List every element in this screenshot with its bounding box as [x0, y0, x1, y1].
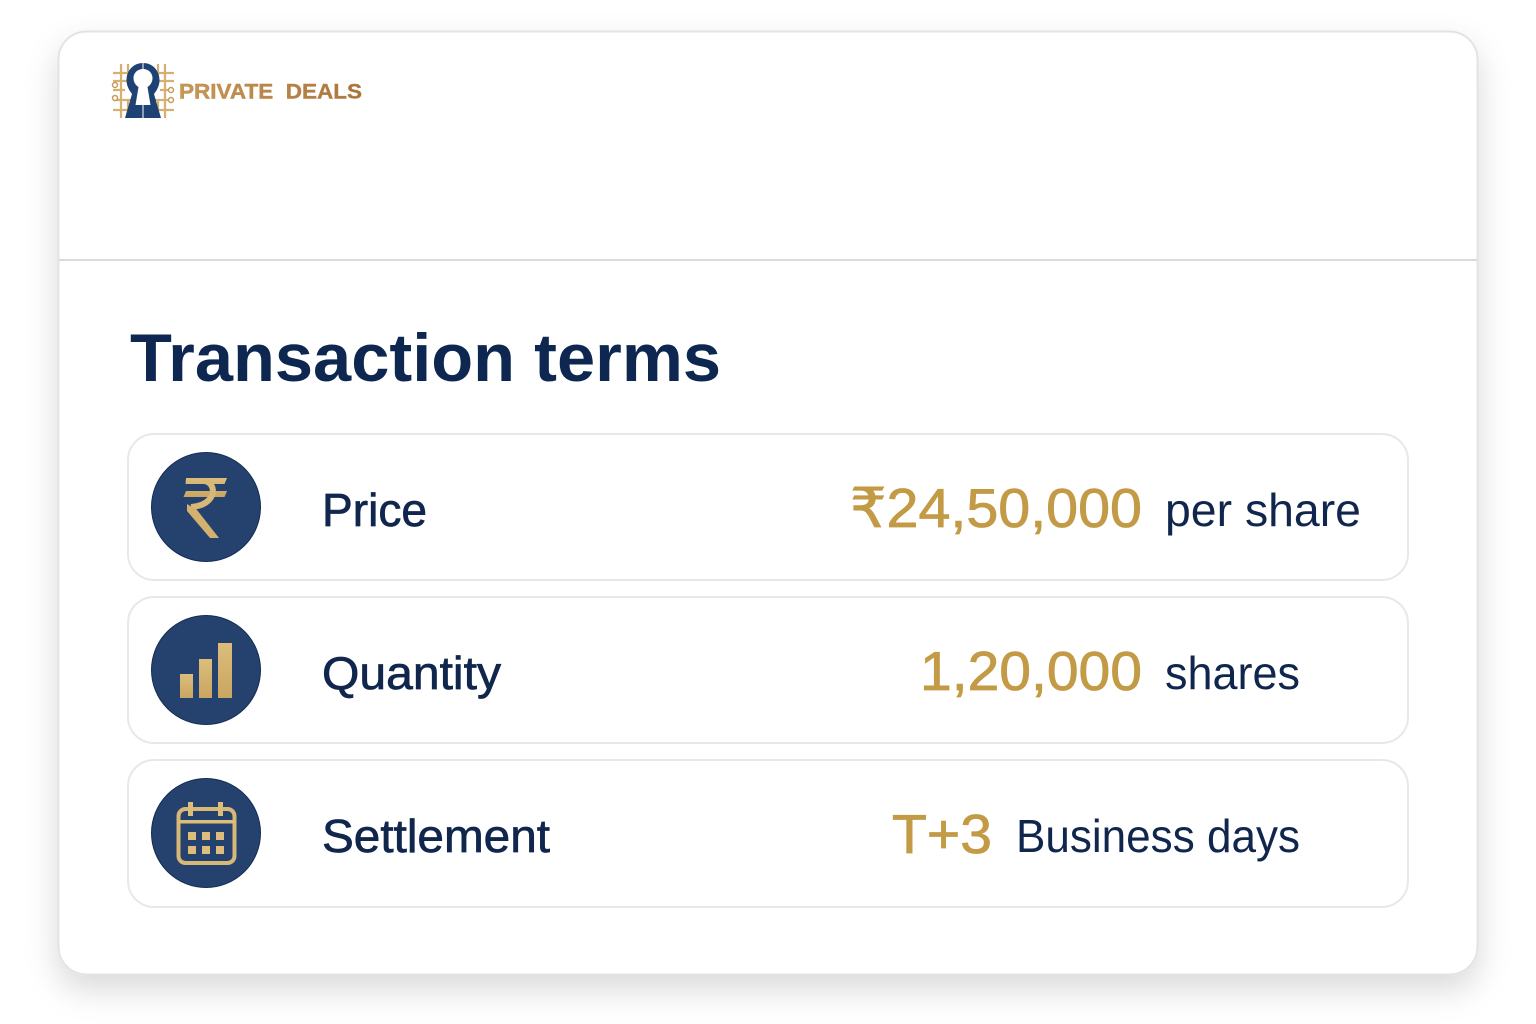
logo: Private Deals	[112, 62, 362, 119]
row: Settlement	[128, 760, 1408, 907]
logo wordmark: PRIVATE DEALS	[179, 80, 362, 104]
row: Price	[128, 434, 1408, 580]
unit: per share: per share	[1165, 484, 1361, 536]
row: Quantity	[128, 597, 1408, 743]
heading: Transaction terms: Transaction terms	[130, 320, 721, 396]
value: price amount: ₹24,50,000	[850, 477, 1142, 539]
label: Price: Price	[322, 484, 427, 536]
label: Quantity: Quantity	[322, 647, 501, 699]
icon: bar chart	[152, 616, 260, 724]
unit: Business days: Business days	[1016, 810, 1300, 862]
icon: keyhole with circuit lines	[112, 62, 174, 119]
icon: calendar	[152, 778, 260, 888]
unit: shares: shares	[1165, 647, 1300, 699]
value: T+3: T+3	[892, 803, 992, 865]
label: Settlement: Settlement	[322, 810, 550, 862]
icon: rupee	[152, 452, 260, 562]
value: quantity amount: 1,20,000	[920, 640, 1142, 702]
